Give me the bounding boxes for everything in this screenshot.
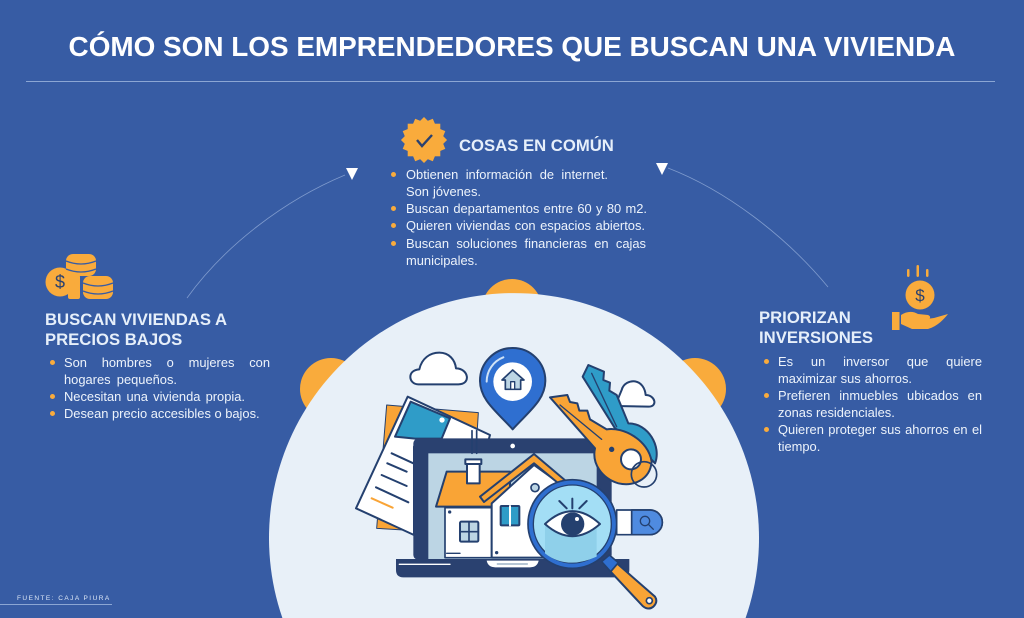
icon: search bar	[617, 510, 662, 535]
source note: FUENTE: CAJA PIURA	[17, 595, 111, 602]
text block: Es un inversor que quiere	[778, 354, 982, 369]
icon: orange key	[550, 395, 657, 487]
text block	[764, 354, 982, 454]
source note	[0, 592, 112, 605]
text block: Quieren viviendas con espacios abiertos.	[406, 218, 645, 233]
text block: hogares pequeños.	[64, 372, 177, 387]
icon: coin in hand: $	[915, 286, 925, 305]
icon: documents	[356, 397, 490, 535]
text block: Obtienen información de internet.	[406, 167, 608, 182]
arrow: right arc	[656, 163, 828, 287]
text block: municipales.	[406, 253, 478, 268]
heading: PRECIOS BAJOS	[45, 330, 182, 349]
illustration: house search	[356, 348, 662, 609]
icon: cloud left	[410, 353, 467, 384]
text block	[391, 167, 647, 268]
icon: houses	[436, 431, 573, 558]
icon: check badge	[401, 117, 447, 163]
heading: PRIORIZAN	[759, 308, 851, 327]
icon: cloud right	[615, 381, 654, 407]
text block: zonas residenciales.	[778, 405, 895, 420]
heading: INVERSIONES	[759, 328, 873, 347]
text block: maximizar sus ahorros.	[778, 371, 912, 386]
text block: Desean precio accesibles o bajos.	[64, 406, 260, 421]
large pale circle	[269, 293, 759, 618]
heading: BUSCAN VIVIENDAS A	[45, 310, 227, 329]
heading	[759, 308, 873, 347]
icon: laptop	[396, 438, 629, 577]
text block: Prefieren inmuebles ubicados en	[778, 388, 982, 403]
arrow: left arc	[187, 168, 358, 298]
icon: magnifying glass	[528, 480, 656, 609]
heading	[45, 310, 227, 349]
panel: priorizan inversiones	[759, 265, 982, 454]
text block: Quieren proteger sus ahorros en el	[778, 422, 982, 437]
icon: blue key	[583, 365, 657, 463]
text block: Necesitan una vivienda propia.	[64, 389, 245, 404]
title: CÓMO SON LOS EMPRENDEDORES QUE BUSCAN UNA VIVIENDA	[69, 31, 955, 62]
text block: Son jóvenes.	[406, 184, 481, 199]
icon: coins: $	[55, 272, 65, 292]
panel: cosas en común	[391, 117, 647, 268]
text block: Son hombres o mujeres con	[64, 355, 270, 370]
heading: COSAS EN COMÚN	[459, 136, 614, 155]
decorative orange circles	[300, 279, 726, 420]
panel: precios bajos	[45, 254, 270, 421]
icon: location pin	[480, 348, 545, 429]
text block: tiempo.	[778, 439, 820, 454]
icon: coins	[46, 254, 113, 299]
text block: Buscan departamentos entre 60 y 80 m2.	[406, 201, 647, 216]
text block: Buscan soluciones financieras en cajas	[406, 236, 646, 251]
icon: coin in hand	[892, 265, 948, 330]
text block	[50, 355, 270, 421]
